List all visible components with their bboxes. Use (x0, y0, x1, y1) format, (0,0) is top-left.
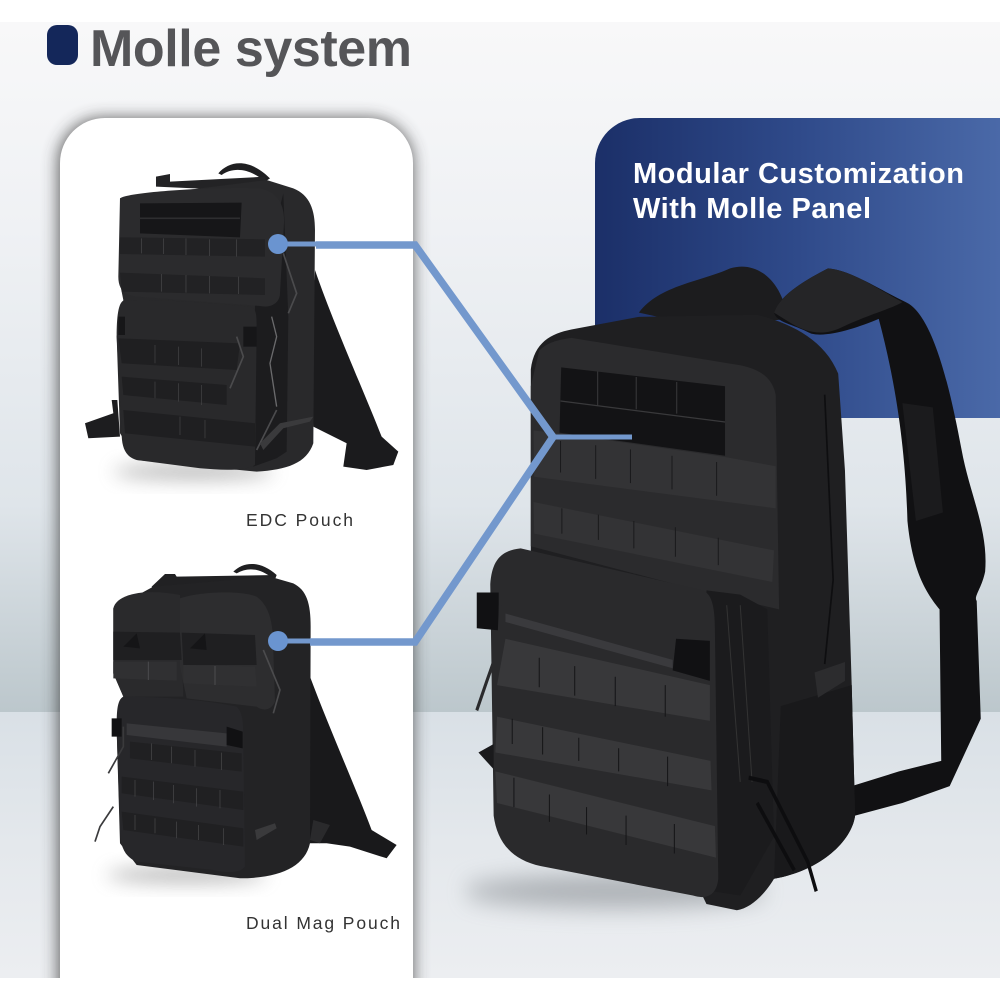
velcro patch (560, 367, 725, 456)
pouch webbing rows (495, 639, 716, 858)
upper front face (531, 338, 779, 609)
title (47, 20, 412, 78)
panel: accessory pouches (58, 118, 413, 1000)
silhouette (113, 577, 311, 878)
icon: title marker (47, 25, 78, 65)
side seam (825, 395, 833, 664)
marker: EDC pouch (268, 234, 288, 254)
label: dual mag pouch: Dual Mag Pouch (246, 913, 400, 933)
zipper pulls (477, 605, 500, 710)
heading: modular customization: With Molle Panel (633, 193, 871, 225)
pouch tabs (477, 593, 710, 681)
connector: dual mag pouch to molle panel (278, 437, 553, 642)
heading: modular customization: Modular Customization (633, 158, 964, 190)
backpack: dual mag pouch (95, 564, 397, 882)
silhouette (117, 180, 315, 472)
marker: dual mag pouch (268, 631, 288, 651)
pouch gusset (706, 590, 774, 896)
backpack: EDC pouch (85, 163, 398, 479)
right shoulder strap (774, 268, 986, 816)
label: EDC pouch: EDC Pouch (246, 510, 353, 530)
left shoulder strap (639, 267, 788, 327)
backpack: main with molle panel (463, 267, 986, 910)
upper webbing rows (534, 430, 776, 582)
title text: Molle system (90, 20, 412, 78)
lower pouch (490, 548, 718, 897)
connector: EDC pouch to molle panel (278, 244, 632, 437)
panel: blue heading panel (595, 118, 1000, 418)
bag body (531, 315, 855, 910)
